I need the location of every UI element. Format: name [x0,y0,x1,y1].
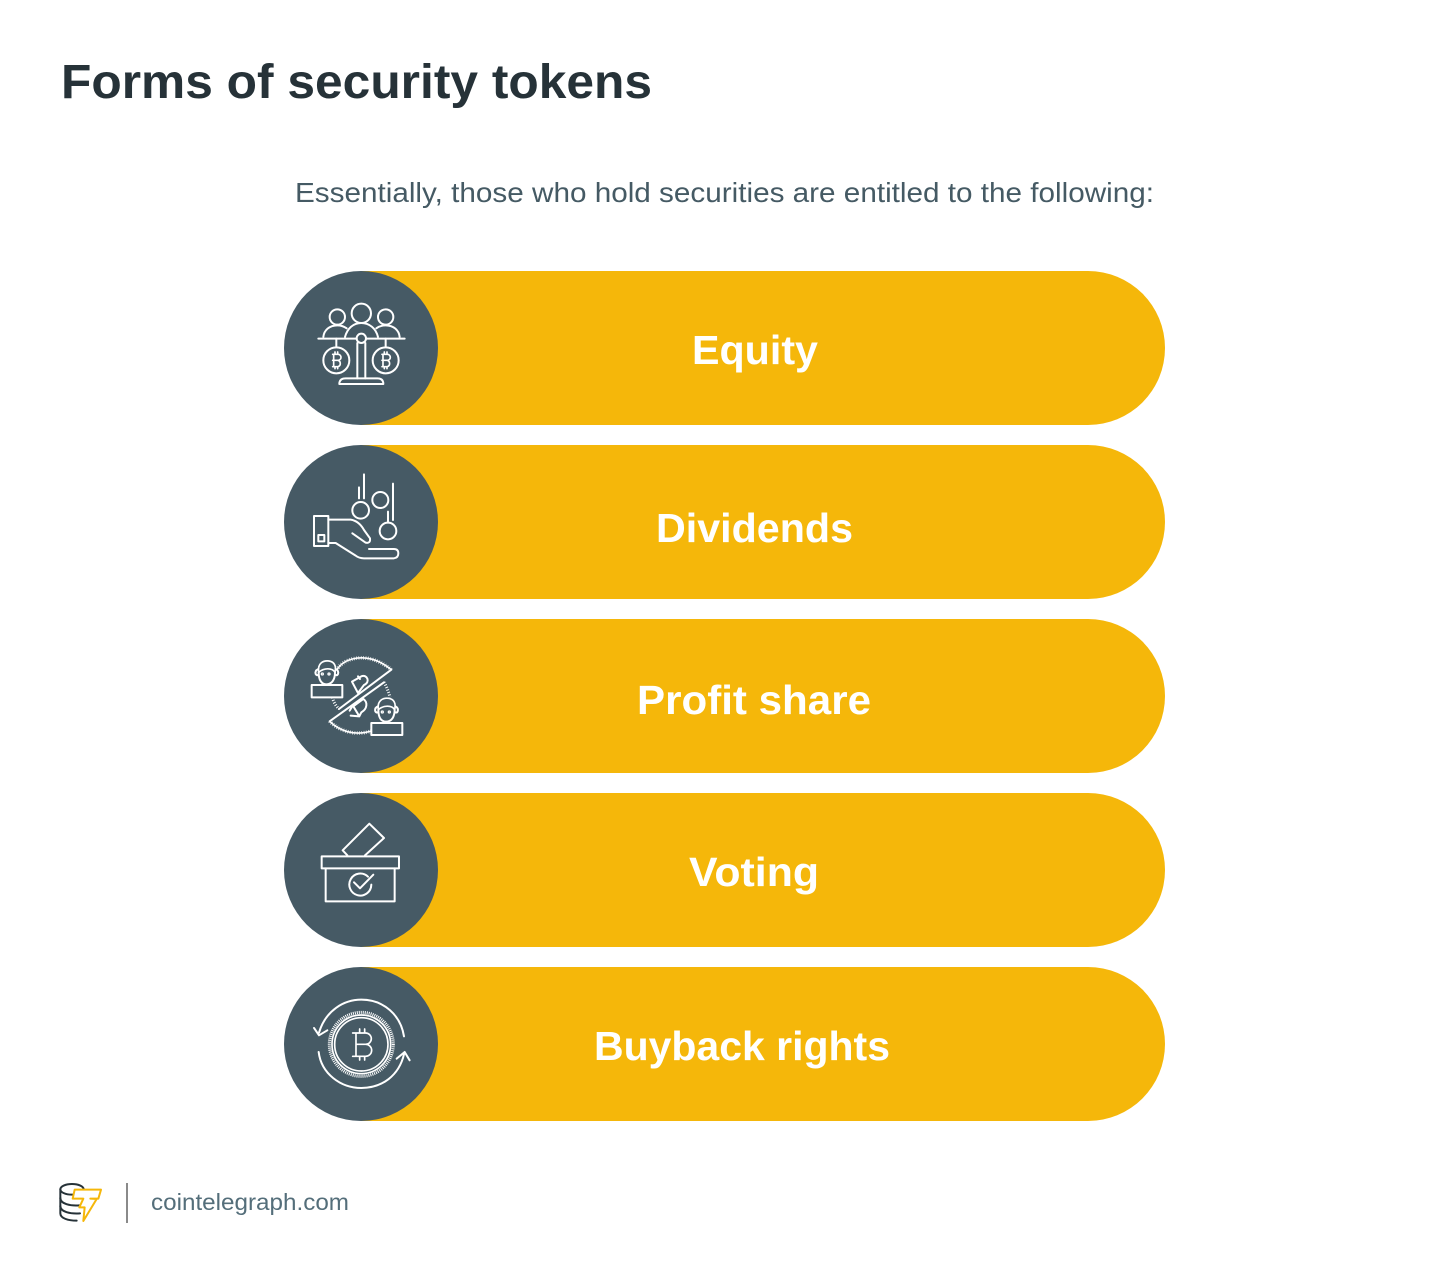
icon: ballot box [322,824,399,901]
subtitle: Essentially, those who hold securities are entitled to the following: [295,177,1154,208]
icon circle: profit share [284,619,438,773]
icon circle: buyback rights [284,967,438,1121]
footer text: cointelegraph.com [151,1189,349,1215]
pill: profit share [361,619,1165,773]
label: buyback rights: Buyback rights [594,1023,890,1069]
panel: dividends [284,445,1165,599]
icon: lightning T [73,1190,101,1221]
pill: equity [361,271,1165,425]
icon: people and scale with bitcoin [318,304,405,384]
panel: equity [284,271,1165,425]
icon: hand catching coins [314,474,398,558]
footer logo: cointelegraph [60,1184,101,1221]
icon circle: voting [284,793,438,947]
icon: bitcoin with circular arrows [314,1000,410,1088]
panel: profit share [284,619,1165,773]
panel: buyback rights [284,967,1165,1121]
footer divider [126,1183,128,1223]
pill: dividends [361,445,1165,599]
title: Forms of security tokens [61,56,652,109]
pill: voting [361,793,1165,947]
panel: voting [284,793,1165,947]
pill: buyback rights [361,967,1165,1121]
label: voting: Voting [689,849,819,895]
label: dividends: Dividends [656,505,853,551]
icon circle: equity [284,271,438,425]
label: equity: Equity [692,327,818,373]
icon: coin stack [60,1184,84,1221]
icon: two people sharing a split coin [312,658,402,735]
label: profit share: Profit share [637,677,871,723]
icon circle: dividends [284,445,438,599]
